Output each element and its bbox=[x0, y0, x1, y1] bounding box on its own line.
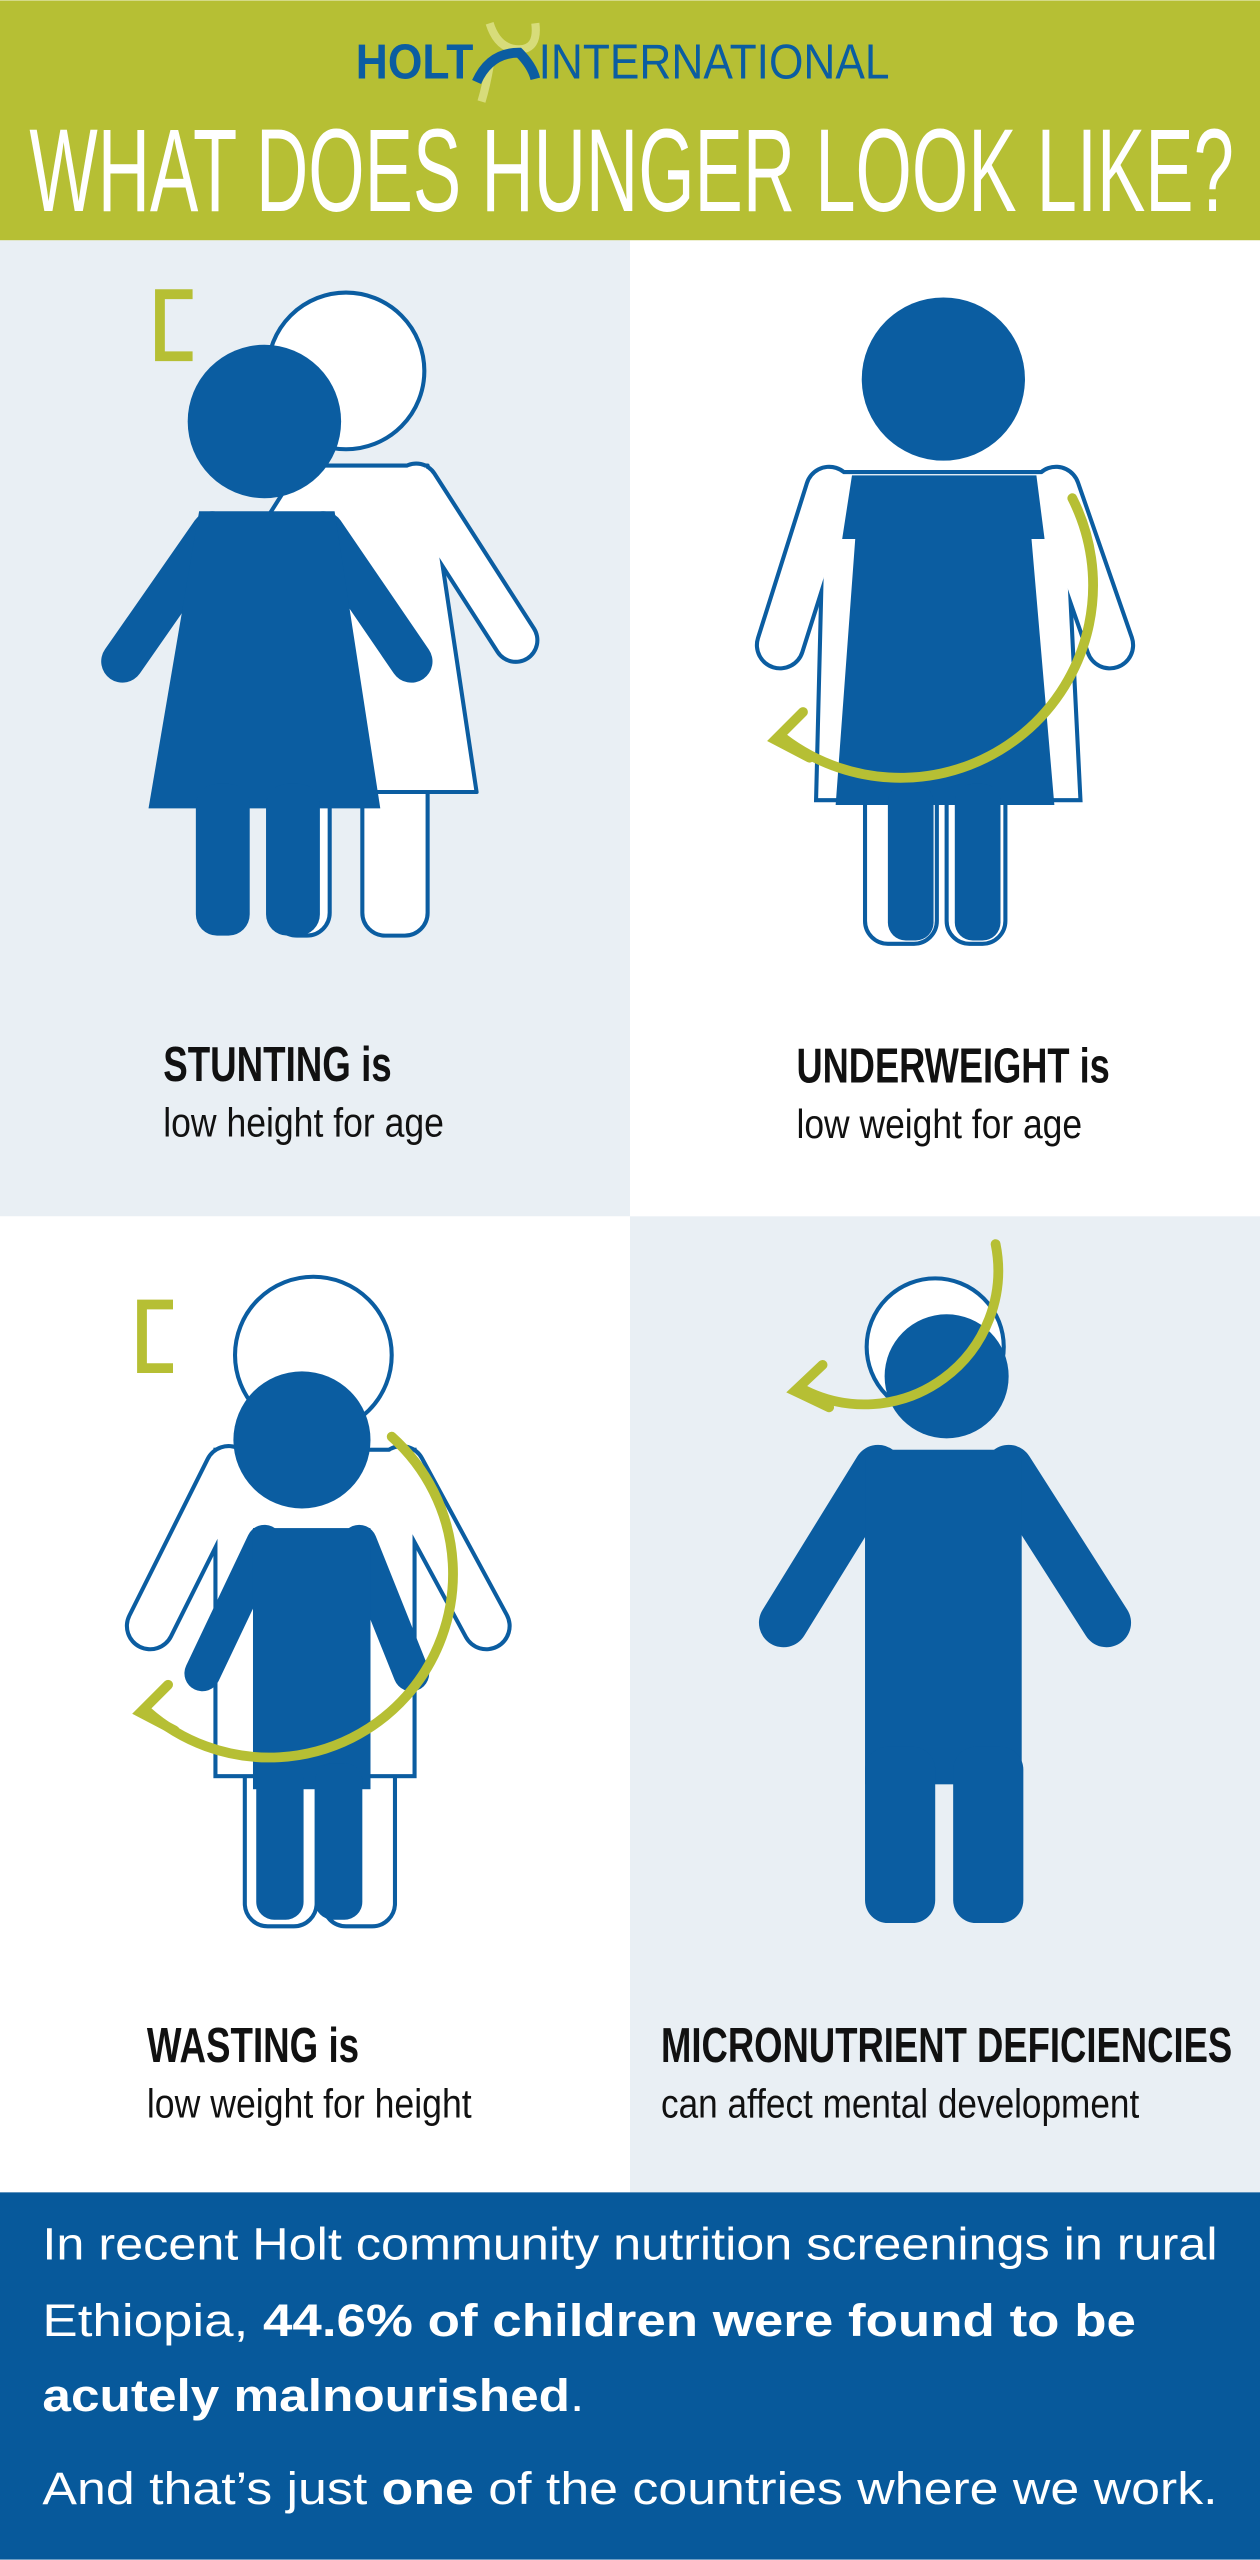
label: micronutrient: can affect mental development bbox=[661, 2080, 1140, 2126]
icon: wasting figures bbox=[140, 1277, 486, 1926]
icon: height bracket bbox=[142, 1304, 173, 1368]
header bbox=[0, 0, 1260, 240]
label: stunting bbox=[163, 1038, 444, 1145]
label: underweight bbox=[796, 1040, 1110, 1147]
icon: micronutrient figure bbox=[783, 1244, 1107, 1923]
footer bbox=[0, 2192, 1260, 2560]
label: underweight: UNDERWEIGHT is bbox=[796, 1040, 1110, 1094]
footer text: In recent Holt community nutrition screenings in rural bbox=[42, 2218, 1218, 2269]
icon: underweight figures bbox=[775, 297, 1110, 944]
label: stunting: STUNTING is bbox=[163, 1038, 392, 1092]
label: underweight: low weight for age bbox=[796, 1101, 1082, 1147]
panel: stunting bbox=[0, 240, 630, 1216]
panel: wasting bbox=[0, 1216, 630, 2192]
label: wasting: low weight for height bbox=[147, 2080, 472, 2126]
label: wasting bbox=[147, 2019, 472, 2126]
panel: micronutrient bbox=[630, 1216, 1260, 2192]
footer text: And that’s just one of the countries where we work. bbox=[42, 2463, 1218, 2514]
arrow: weight arc bbox=[775, 498, 1093, 778]
label: stunting: low height for age bbox=[163, 1099, 444, 1145]
footer text: Ethiopia, 44.6% of children were found to be bbox=[42, 2295, 1136, 2346]
arrow: brain arc bbox=[795, 1244, 998, 1407]
label: wasting: WASTING is bbox=[147, 2019, 359, 2073]
logo: HOLT bbox=[356, 36, 473, 90]
icon: stunting figures bbox=[122, 293, 516, 936]
label: micronutrient bbox=[661, 2019, 1232, 2126]
icon: height bracket bbox=[160, 294, 193, 356]
footer text: acutely malnourished . bbox=[42, 2370, 584, 2421]
logo: INTERNATIONAL bbox=[539, 36, 890, 90]
arrow: weight arc bbox=[140, 1437, 453, 1758]
logo bbox=[356, 23, 890, 102]
footer text bbox=[42, 2218, 1218, 2514]
panel: underweight bbox=[630, 240, 1260, 1216]
